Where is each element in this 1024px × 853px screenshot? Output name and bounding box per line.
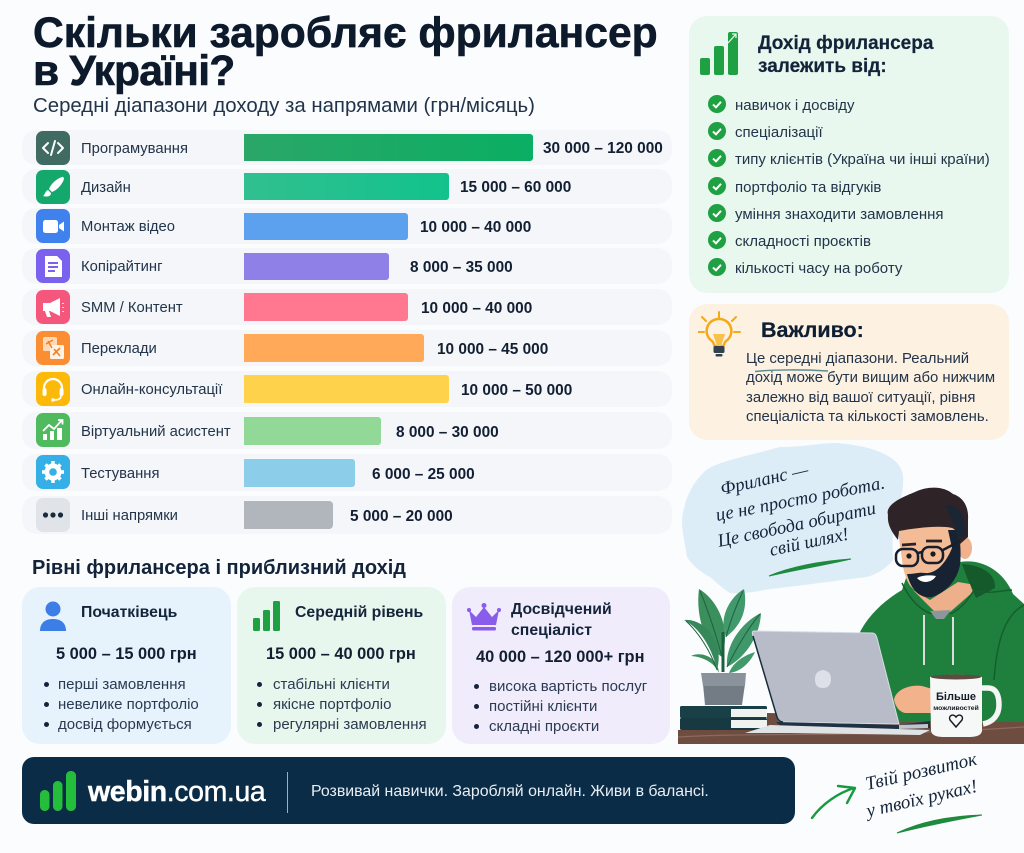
hood collar [902, 583, 1012, 614]
row: design [22, 169, 672, 204]
note text: Це середні діапазони. Реальний [746, 351, 969, 367]
quote text: Це свобода обирати [715, 499, 878, 552]
label: Програмування [81, 141, 188, 157]
bullet list: досвід формується [58, 716, 192, 733]
label: Інші напрямки [81, 508, 178, 524]
bar [244, 375, 449, 403]
heading: спеціаліст [511, 622, 592, 639]
footer banner [22, 757, 795, 824]
paper [745, 725, 930, 735]
icon: camera [36, 209, 70, 243]
value: 10 000 – 40 000 [420, 219, 531, 236]
title: в Україні? [33, 47, 234, 95]
value: 5 000 – 20 000 [350, 508, 453, 525]
bullet list: невелике портфоліо [58, 696, 199, 713]
subtitle: Середні діапазони доходу за напрямами (грн/місяць) [33, 95, 535, 117]
face [898, 526, 958, 593]
row: other [22, 496, 672, 534]
illustration: freelancer scene [678, 443, 1024, 744]
value: 15 000 – 60 000 [460, 179, 571, 196]
income range: 15 000 – 40 000 грн [266, 645, 416, 663]
beard [907, 530, 961, 597]
row: testing [22, 454, 672, 491]
table highlight [678, 727, 1024, 737]
section heading: levels: Рівні фрилансера і приблизний дохід [32, 557, 406, 579]
bar [244, 417, 381, 445]
note text: спеціаліста та кількості замовлень. [746, 409, 989, 425]
bullet list [257, 676, 427, 733]
bullet list: постійні клієнти [489, 698, 597, 715]
label: Дизайн [81, 180, 131, 196]
heading: Початківець [81, 604, 177, 621]
check list: складності проєктів [735, 233, 871, 250]
bullet list: складні проєкти [489, 718, 599, 735]
icon: crown [467, 603, 501, 630]
hair shadow [945, 505, 966, 540]
value: 8 000 – 30 000 [396, 424, 499, 441]
speech blob [682, 443, 903, 593]
drawstrings [924, 615, 953, 665]
value: 30 000 – 120 000 [543, 140, 663, 157]
panel: senior [452, 587, 670, 744]
row: copywriting [22, 248, 672, 284]
heading: Досвідчений [511, 601, 612, 618]
bar [244, 173, 449, 200]
check list: типу клієнтів (Україна чи інші країни) [735, 151, 990, 168]
lid [752, 631, 899, 724]
row: SMM [22, 289, 672, 325]
logo: apple [815, 670, 831, 688]
icon: dots [36, 498, 70, 532]
value: 8 000 – 35 000 [410, 259, 513, 276]
label: Онлайн-консультації [81, 382, 222, 398]
bar [244, 501, 333, 529]
value: 10 000 – 50 000 [461, 382, 572, 399]
pot [703, 684, 745, 705]
row: virtual assistant [22, 412, 672, 449]
icon: headset [36, 372, 70, 406]
value: 10 000 – 40 000 [421, 300, 532, 317]
bullet list: висока вартість послуг [489, 678, 647, 695]
smile [917, 575, 936, 582]
plant [684, 589, 761, 705]
ear [958, 537, 972, 559]
title: Скільки заробляє фрилансер [33, 9, 658, 57]
row: online consulting [22, 371, 672, 407]
icon: growth bars [700, 32, 738, 75]
panel heading: залежить від: [758, 56, 887, 76]
icon: gear [36, 455, 70, 489]
closing handwritten note: Твій розвиток [863, 750, 980, 795]
quote text: свій шлях! [768, 525, 851, 561]
panel heading: Важливо: [761, 318, 864, 342]
title [33, 9, 658, 95]
bar [244, 253, 389, 280]
laptop [745, 631, 930, 735]
man [859, 488, 1024, 722]
income range: 5 000 – 15 000 грн [56, 645, 197, 663]
label: Монтаж відео [81, 219, 175, 235]
mug heart [950, 715, 962, 727]
panel heading [758, 33, 934, 76]
closing handwritten note [862, 750, 982, 834]
glasses [896, 541, 960, 566]
icon: person [40, 602, 66, 631]
quote text: це не просто робота. [714, 473, 887, 526]
hoodie [859, 561, 1024, 722]
row: video editing [22, 208, 672, 244]
income range: 40 000 – 120 000+ грн [476, 648, 644, 666]
check list: кількості часу на роботу [735, 260, 902, 277]
bar [244, 213, 408, 240]
hand [894, 686, 936, 713]
quote text: Фриланс — [719, 460, 811, 500]
panel: beginner [22, 587, 231, 744]
note text [746, 351, 995, 425]
bar [244, 459, 355, 487]
icon: code [36, 131, 70, 165]
bar [244, 334, 424, 362]
tagline: Розвивай навички. Заробляй онлайн. Живи в балансі. [311, 783, 709, 800]
value: 10 000 – 45 000 [437, 341, 548, 358]
check list: портфоліо та відгуків [735, 179, 881, 196]
panel: mid level [237, 587, 446, 744]
sleeve crease [994, 605, 1024, 680]
note text: дохід може бути вищим або нижчим [746, 370, 995, 386]
bar [244, 134, 533, 161]
hood inner [962, 564, 995, 598]
icon: document [36, 249, 70, 283]
row: translations [22, 330, 672, 366]
note underline [897, 815, 982, 833]
label: Копірайтинг [81, 259, 162, 275]
check list: спеціалізації [735, 124, 823, 141]
arrow [810, 784, 856, 820]
value: 6 000 – 25 000 [372, 466, 475, 483]
keyboard side [899, 724, 928, 729]
quote text [714, 460, 887, 561]
base [776, 721, 930, 729]
panel: income depends on [689, 16, 1009, 293]
label: Переклади [81, 341, 157, 357]
row: programming [22, 130, 672, 165]
bar chart: income by direction [36, 131, 663, 532]
label: SMM / Контент [81, 300, 183, 316]
quote underline [769, 559, 851, 576]
lid edge [753, 636, 783, 722]
check list: уміння знаходити замовлення [735, 206, 944, 223]
table [678, 713, 1024, 744]
books [680, 706, 767, 730]
mug: можливостей [933, 704, 979, 712]
note text: залежно від вашої ситуації, рівня [746, 390, 975, 406]
icon: megaphone [36, 290, 70, 324]
heading [511, 601, 612, 639]
hand-drawn underline [754, 369, 828, 372]
neck [913, 582, 973, 612]
icon: translate [36, 331, 70, 365]
mug text: Більше [936, 691, 976, 703]
bullet list: стабільні клієнти [273, 676, 390, 693]
icon: light bulb [698, 311, 741, 356]
bar [244, 293, 408, 321]
bullet list [474, 678, 647, 735]
mug [930, 674, 999, 737]
bullet list: якісне портфоліо [273, 696, 391, 713]
eyes [906, 553, 912, 559]
icon: bars [253, 601, 280, 631]
bullet list: регулярні замовлення [273, 716, 427, 733]
check list [708, 95, 990, 277]
pot rim [701, 673, 746, 686]
panel heading: Дохід фрилансера [758, 33, 933, 54]
bullet list: перші замовлення [58, 676, 186, 693]
panel: important [689, 304, 1009, 440]
label: Тестування [81, 466, 159, 482]
check list: навичок і досвіду [735, 97, 855, 114]
bullet list [44, 676, 199, 733]
logo text: webin.com.ua [88, 776, 265, 808]
eyebrows [902, 541, 942, 545]
t-shirt [930, 610, 951, 619]
icon: growth chart [36, 413, 70, 447]
closing handwritten note: у твоїх руках! [862, 776, 979, 822]
leaves [698, 589, 725, 657]
logo icon [40, 771, 76, 811]
label: Віртуальний асистент [81, 424, 231, 440]
hair [888, 488, 968, 545]
icon: brush [36, 170, 70, 204]
heading: Середній рівень [295, 604, 423, 621]
